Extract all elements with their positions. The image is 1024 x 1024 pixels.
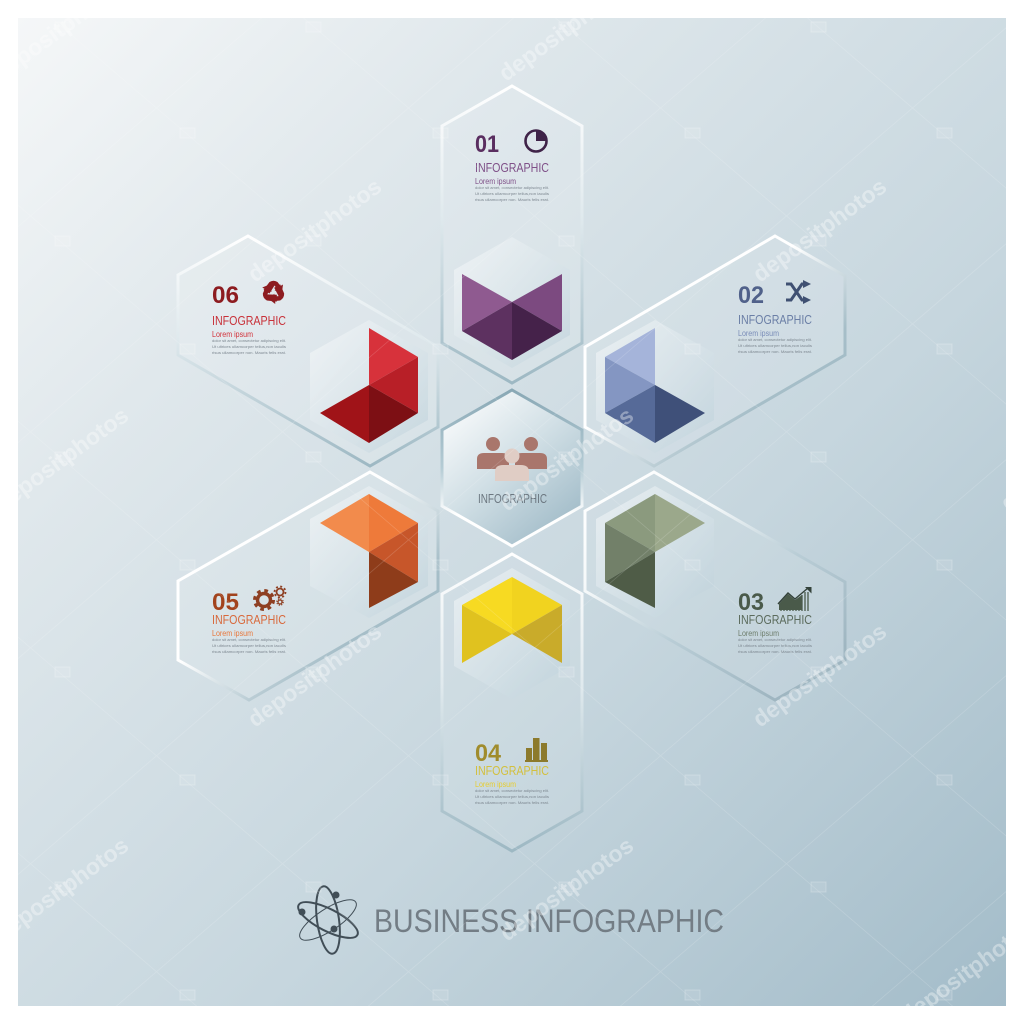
text block 05: [212, 589, 286, 654]
text block 05: Ut ultrices ullamcorper tellus,non iaculis: [212, 643, 286, 648]
icon: people: [477, 437, 547, 481]
panel: centre hexagon: [442, 390, 582, 546]
hexagon 01 frame: [442, 86, 582, 383]
text block 06: risus ullamcorper non. Mauris felis erat.: [212, 350, 286, 355]
centre label: INFOGRAPHIC: [478, 492, 547, 506]
text block 03: 03: [738, 589, 764, 616]
text block 03: [738, 589, 812, 654]
text block 05: Lorem ipsum: [212, 628, 253, 638]
text block 02: risus ullamcorper non. Mauris felis erat.: [738, 349, 812, 354]
icon: rising chart: [778, 587, 812, 611]
text block 02: Lorem ipsum: [738, 328, 779, 338]
text block 06: Ut ultrices ullamcorper tellus,non iaculis: [212, 344, 286, 349]
icon: recycle: [259, 281, 288, 306]
text block 03: Lorem ipsum: [738, 628, 779, 638]
text block 06: INFOGRAPHIC: [212, 314, 286, 328]
watermark text: depositphotos: [243, 618, 386, 732]
hexagon 03 frame: [585, 472, 845, 700]
hexagon 04 frame: [442, 554, 582, 851]
cube 05: orange: [310, 486, 428, 618]
watermark text: depositphotos: [495, 832, 638, 946]
watermark text: depositphotos: [495, 402, 638, 516]
text block 03: risus ullamcorper non. Mauris felis erat.: [738, 649, 812, 654]
hexagon 05 frame: [178, 472, 438, 700]
text block 04: [475, 740, 549, 805]
text block 02: INFOGRAPHIC: [738, 313, 812, 327]
cube 02: blue: [596, 320, 714, 453]
text block 06: [212, 282, 286, 355]
text block 01: risus ullamcorper non. Mauris felis erat.: [475, 197, 549, 202]
text block 04: 04: [475, 740, 502, 767]
text block 01: Lorem ipsum: [475, 176, 516, 186]
main title: BUSINESS INFOGRAPHIC: [374, 903, 724, 939]
text block 04: Lorem ipsum: [475, 779, 516, 789]
text block 05: INFOGRAPHIC: [212, 613, 286, 627]
text block 03: Ut ultrices ullamcorper tellus,non iaculis: [738, 643, 812, 648]
watermark text: depositphotos: [748, 173, 891, 287]
text block 06: dolor sit amet, consectetur adipiscing elit.: [212, 338, 286, 343]
text block 04: Ut ultrices ullamcorper tellus,non iaculis: [475, 794, 549, 799]
text block 04: risus ullamcorper non. Mauris felis erat.: [475, 800, 549, 805]
icon: shuffle: [786, 280, 811, 304]
cube 04: yellow: [454, 568, 570, 699]
logo: atom icon: [294, 885, 362, 955]
text block 01: [475, 131, 549, 202]
text block 02: Ut ultrices ullamcorper tellus,non iaculis: [738, 343, 812, 348]
cube 03: green: [596, 486, 714, 618]
text block 01: Ut ultrices ullamcorper tellus,non iaculis: [475, 191, 549, 196]
text block 05: dolor sit amet, consectetur adipiscing elit.: [212, 637, 286, 642]
text block 05: risus ullamcorper non. Mauris felis erat.: [212, 649, 286, 654]
text block 04: dolor sit amet, consectetur adipiscing elit.: [475, 788, 549, 793]
text block 01: INFOGRAPHIC: [475, 161, 549, 175]
hexagon 06 frame: [178, 236, 438, 466]
hexagon 02 frame: [585, 236, 845, 466]
text block 03: INFOGRAPHIC: [738, 613, 812, 627]
text block 02: 02: [738, 282, 764, 309]
icon: bar chart: [525, 738, 548, 762]
text block 02: dolor sit amet, consectetur adipiscing elit.: [738, 337, 812, 342]
text block 06: 06: [212, 282, 239, 309]
icon: pie chart: [526, 130, 546, 152]
text block 05: 05: [212, 589, 239, 616]
text block 03: dolor sit amet, consectetur adipiscing elit.: [738, 637, 812, 642]
watermark text: depositphotos: [243, 173, 386, 287]
text block 04: INFOGRAPHIC: [475, 764, 549, 778]
text block 01: 01: [475, 131, 499, 158]
cube 01: purple: [454, 237, 570, 368]
text block 06: Lorem ipsum: [212, 329, 253, 339]
text block 02: [738, 282, 812, 354]
text block 01: dolor sit amet, consectetur adipiscing elit.: [475, 185, 549, 190]
cube 06: red: [310, 320, 428, 453]
icon: gears: [254, 586, 286, 610]
watermark text: depositphotos: [748, 618, 891, 732]
